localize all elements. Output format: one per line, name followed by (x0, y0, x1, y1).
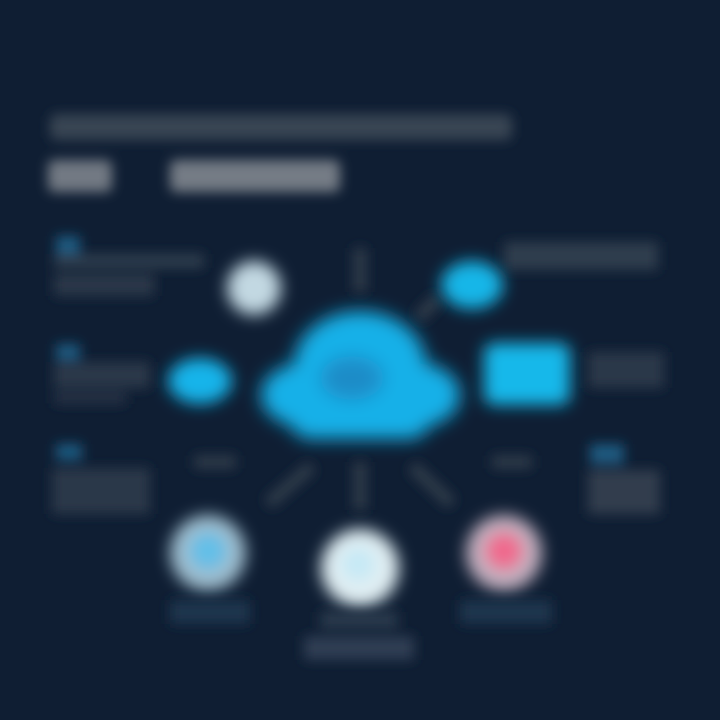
label: bottom center (304, 612, 414, 660)
icon: pink node bottom right (466, 515, 542, 591)
text block: top right (504, 242, 658, 270)
icon: white node bottom center (321, 529, 399, 607)
icon: small cloud top right (441, 261, 503, 309)
icon: central cloud (261, 311, 460, 439)
icon: white circle (227, 261, 281, 315)
connector lines (194, 248, 532, 510)
icon: blue node bottom left (170, 515, 246, 591)
text block: lower left (52, 444, 150, 514)
icon: server box right (484, 343, 570, 405)
text block: top left (54, 236, 204, 296)
label: bottom right (460, 600, 552, 624)
text block: lower right (588, 444, 660, 514)
label: bottom left (170, 600, 250, 624)
title (48, 114, 512, 192)
text block: middle left (54, 344, 150, 404)
text block: middle right (588, 352, 664, 388)
icon: small cloud left (168, 358, 232, 404)
